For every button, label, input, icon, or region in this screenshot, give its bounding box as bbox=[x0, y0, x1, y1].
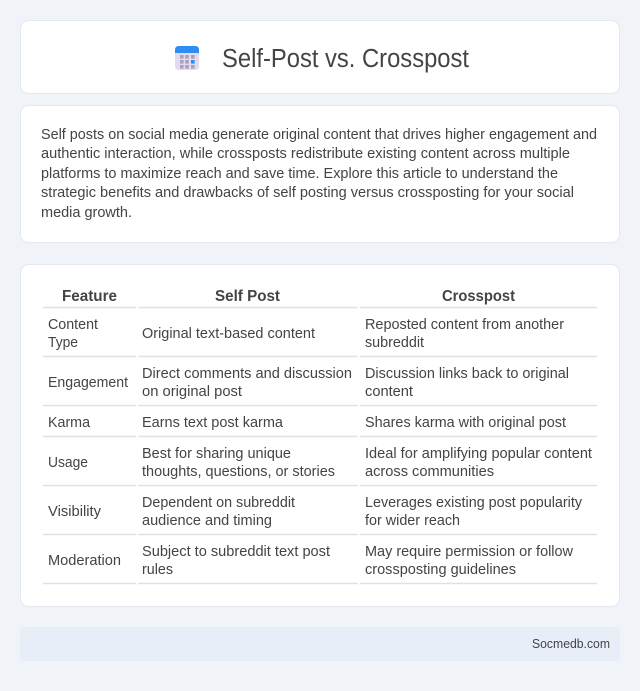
text block: introduction: platforms to maximize reach and save time. Explore this article to understand the bbox=[41, 166, 558, 182]
row: content type: Original text-based content bbox=[142, 326, 315, 342]
row: moderation bbox=[48, 544, 573, 578]
row: usage: across communities bbox=[365, 464, 494, 480]
text block: introduction: Self posts on social media generate original content that drives higher engagement and bbox=[41, 127, 597, 143]
row: moderation: Moderation bbox=[48, 553, 121, 569]
row: usage: Best for sharing unique bbox=[142, 446, 291, 462]
row: usage: thoughts, questions, or stories bbox=[142, 464, 335, 480]
row: engagement: content bbox=[365, 384, 413, 400]
row: content type: Content bbox=[48, 317, 98, 333]
row: moderation: crossposting guidelines bbox=[365, 562, 516, 578]
text block: introduction bbox=[41, 127, 597, 221]
row: visibility: Leverages existing post popularity bbox=[365, 495, 583, 511]
text block: introduction: strategic benefits and drawbacks of self posting versus crossposting for your social bbox=[41, 185, 574, 201]
row: moderation: rules bbox=[142, 562, 173, 578]
row: usage: Usage bbox=[48, 455, 88, 471]
panel: comparison table bbox=[20, 264, 620, 606]
row: engagement: Direct comments and discussion bbox=[142, 366, 352, 382]
icon: calendar bbox=[175, 46, 199, 70]
footer bbox=[20, 627, 620, 661]
text block: introduction: authentic interaction, while crossposts redistribute existing content across multiple bbox=[41, 146, 570, 162]
table header bbox=[62, 288, 516, 305]
row: engagement: Engagement bbox=[48, 375, 128, 391]
row: karma: Karma bbox=[48, 415, 91, 431]
row: engagement: on original post bbox=[142, 384, 242, 400]
row: content type: Type bbox=[48, 335, 78, 351]
table header: Crosspost bbox=[442, 288, 516, 305]
row: engagement: Discussion links back to original bbox=[365, 366, 569, 382]
row: content type bbox=[48, 317, 564, 351]
footer credit: Socmedb.com bbox=[532, 636, 610, 651]
panel: header bbox=[20, 20, 620, 94]
row: visibility: Dependent on subreddit bbox=[142, 495, 295, 511]
title: Self-Post vs. Crosspost bbox=[222, 45, 469, 73]
row: content type: subreddit bbox=[365, 335, 424, 351]
row: visibility: audience and timing bbox=[142, 513, 272, 529]
row: moderation: May require permission or follow bbox=[365, 544, 573, 560]
table header: Self Post bbox=[215, 288, 281, 305]
row: visibility: Visibility bbox=[48, 504, 102, 520]
row: engagement bbox=[48, 366, 569, 400]
row: moderation: Subject to subreddit text post bbox=[142, 544, 330, 560]
text block: introduction: media growth. bbox=[41, 205, 132, 221]
row: karma: Earns text post karma bbox=[142, 415, 284, 431]
row: visibility bbox=[48, 495, 583, 529]
row: usage: Ideal for amplifying popular content bbox=[365, 446, 592, 462]
panel: introduction bbox=[20, 106, 620, 242]
row: karma bbox=[48, 415, 566, 431]
row: content type: Reposted content from another bbox=[365, 317, 564, 333]
row: usage bbox=[48, 446, 592, 480]
row: visibility: for wider reach bbox=[365, 513, 460, 529]
row: karma: Shares karma with original post bbox=[365, 415, 566, 431]
table header: Feature bbox=[62, 288, 117, 305]
